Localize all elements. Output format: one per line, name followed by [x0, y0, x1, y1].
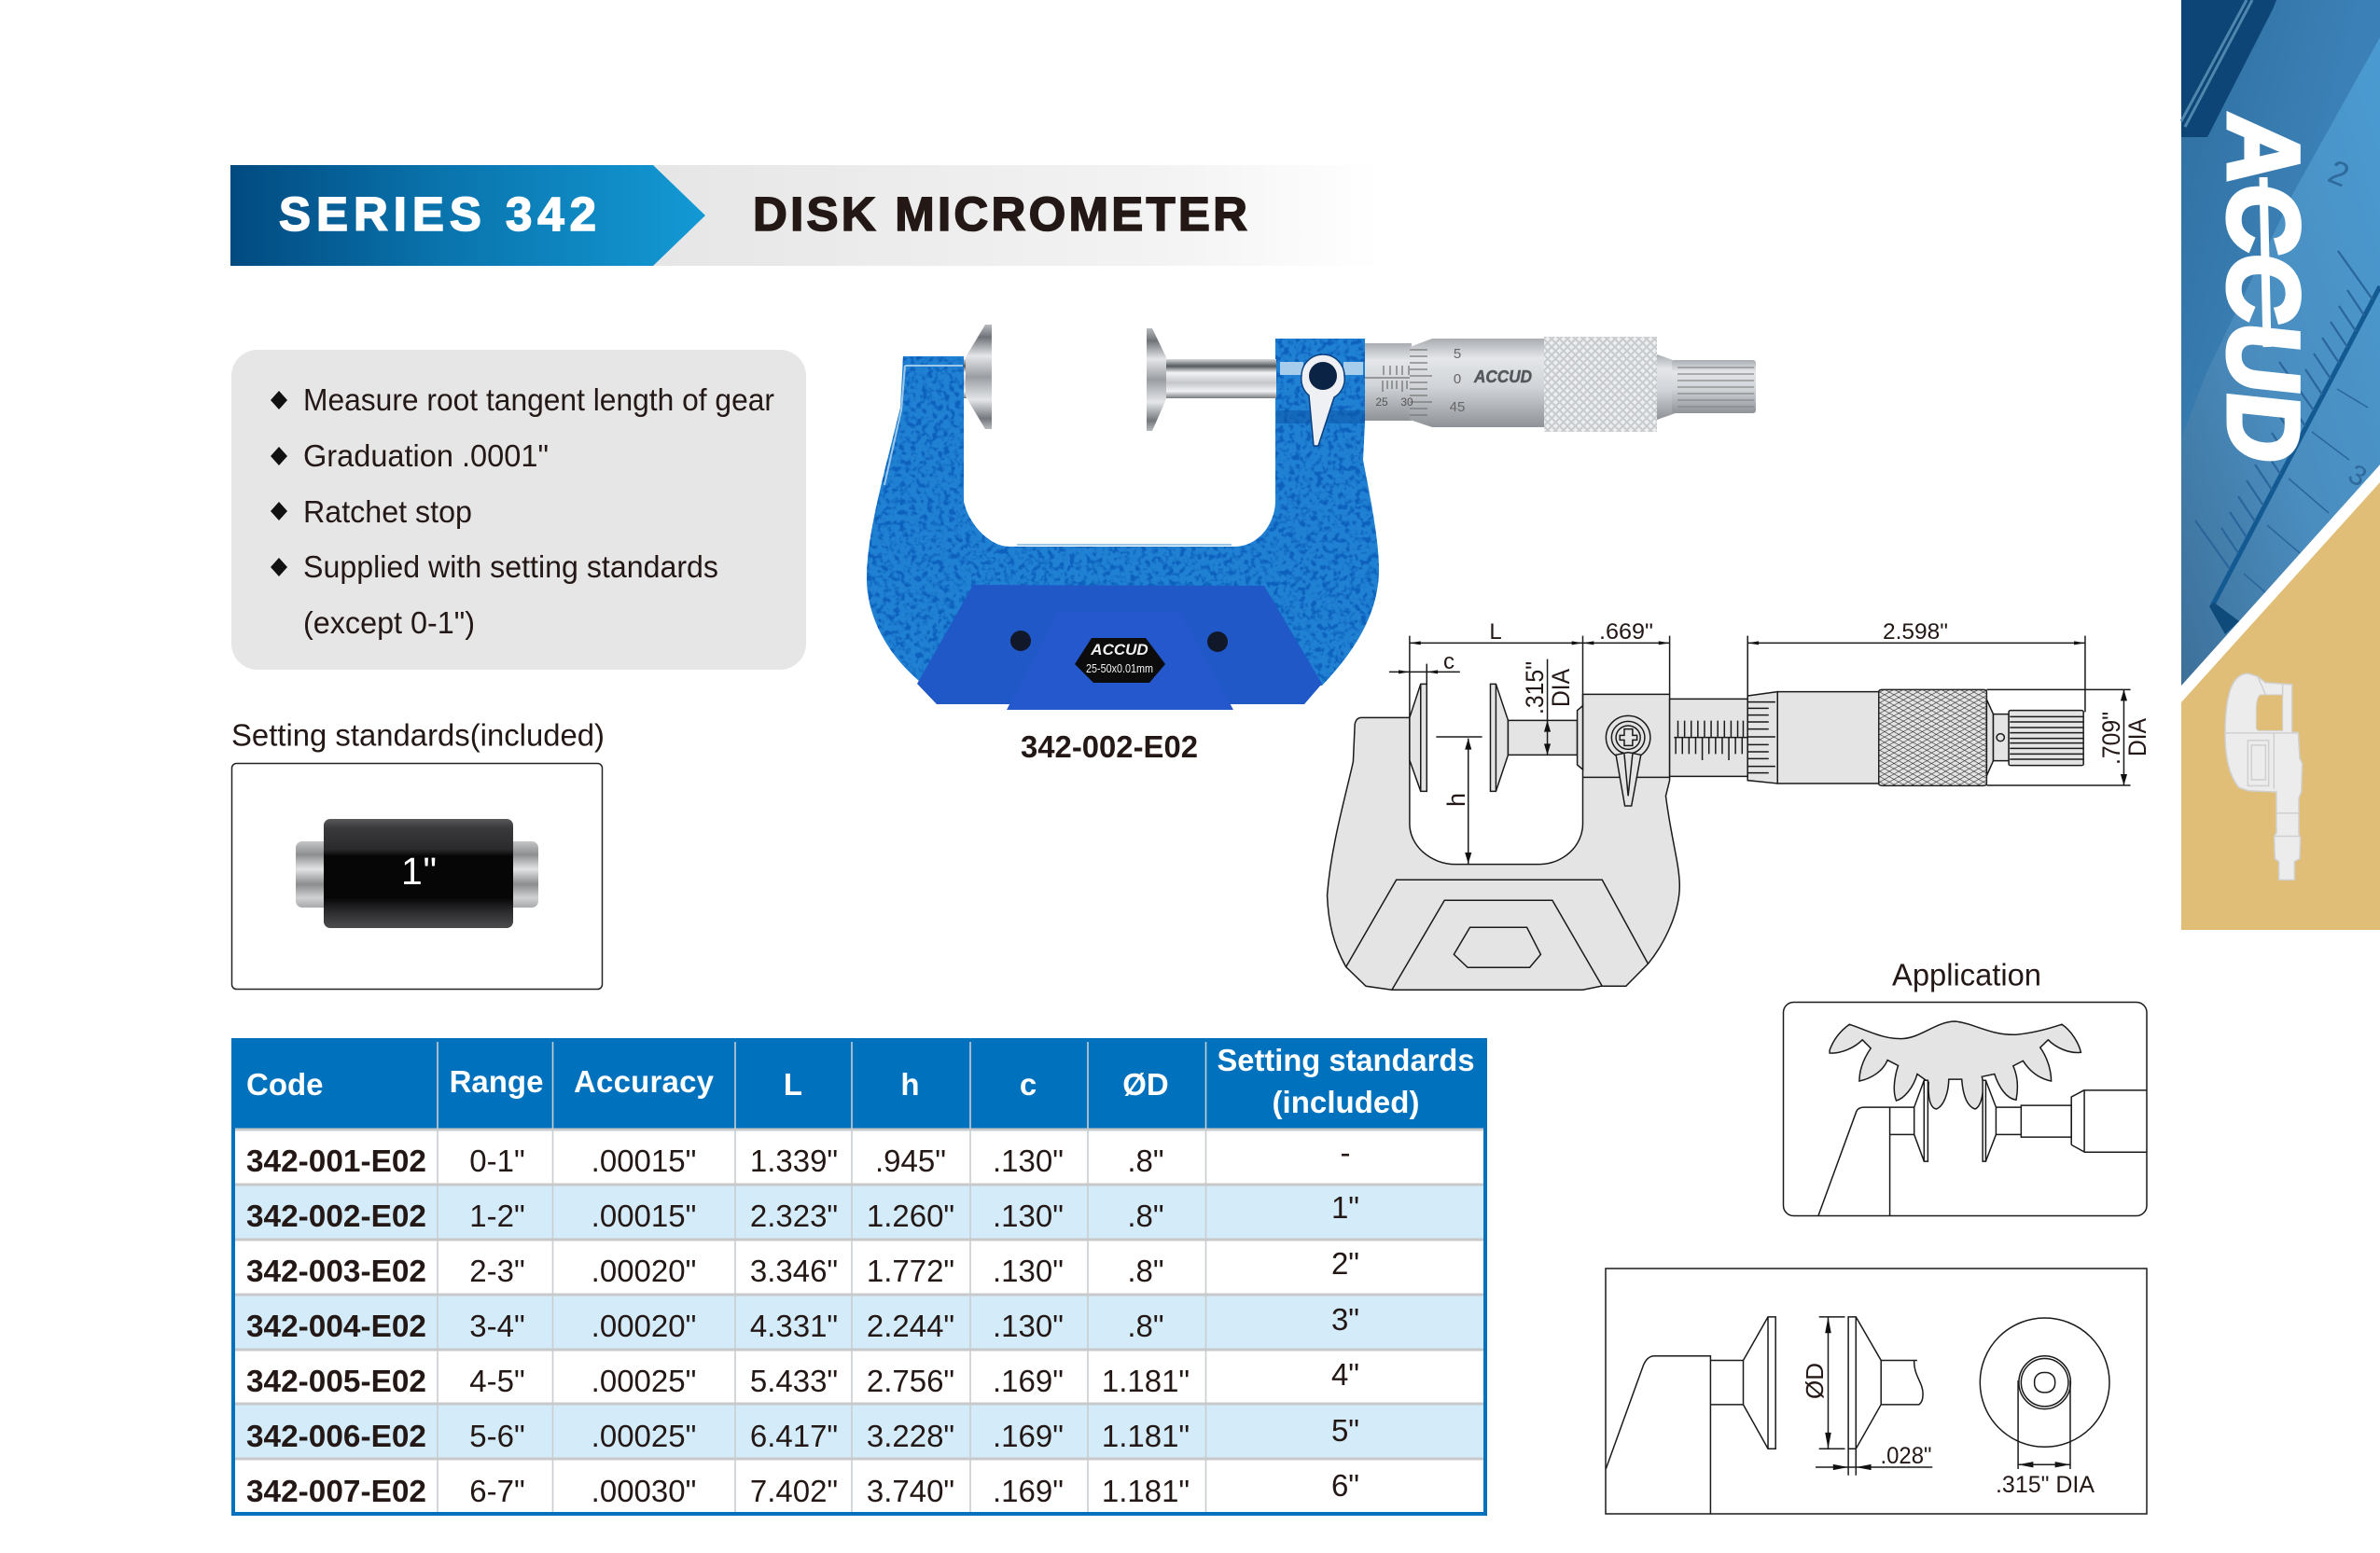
row 342-007-E02: 6" — [1331, 1468, 1359, 1503]
frame — [867, 339, 1379, 686]
detail labels: .315" DIA — [1996, 1472, 2095, 1498]
thimble numerals and logo: 25 — [1375, 395, 1388, 409]
thimble numerals and logo: 5 — [1454, 346, 1461, 362]
row 342-001-E02: 0-1" — [469, 1144, 525, 1178]
table header: Code — [246, 1067, 323, 1102]
row 342-006-E02: 342-006-E02 — [246, 1419, 426, 1453]
feature: setting standards — [271, 549, 718, 640]
row 342-004-E02: 342-004-E02 — [246, 1309, 426, 1343]
row 342-003-E02: 342-003-E02 — [246, 1254, 426, 1288]
row 342-002-E02: 2.323" — [750, 1199, 838, 1233]
row 342-007-E02: .00030" — [592, 1474, 696, 1508]
row 342-004-E02: 4.331" — [750, 1309, 838, 1343]
row 342-005-E02: 1.181" — [1102, 1364, 1190, 1398]
alternating row shading — [233, 1185, 1485, 1459]
ruler photo panel — [2181, 0, 2380, 686]
detail labels: ØD — [1801, 1363, 1829, 1399]
row 342-007-E02: 342-007-E02 — [246, 1474, 426, 1508]
thimble numerals and logo: 30 — [1400, 395, 1413, 409]
row 342-005-E02: 4" — [1331, 1357, 1359, 1392]
row 342-001-E02: .00015" — [592, 1144, 696, 1178]
row 342-006-E02: 1.181" — [1102, 1419, 1190, 1453]
dimension labels — [1442, 619, 2151, 807]
table header — [231, 1038, 1487, 1129]
thimble numerals and logo: 0 — [1454, 371, 1461, 387]
row 342-002-E02: .00015" — [592, 1199, 696, 1233]
logo badge: ACCUD — [1090, 641, 1148, 659]
panel: setting standard image — [231, 763, 603, 989]
row 342-004-E02: 2.244" — [867, 1309, 954, 1343]
logo badge — [1075, 638, 1165, 683]
thimble numerals and logo: 45 — [1450, 399, 1465, 415]
dimension labels: h — [1442, 793, 1470, 807]
gear and anvils — [1818, 1021, 2147, 1216]
row 342-006-E02: 5" — [1331, 1413, 1359, 1448]
row 342-004-E02: 3" — [1331, 1302, 1359, 1337]
base cover — [917, 585, 1322, 710]
row 342-001-E02: - — [1340, 1135, 1351, 1170]
panel: disk detail diagram — [1606, 1269, 2147, 1514]
gold panel — [2181, 482, 2380, 930]
grey title strip — [653, 165, 1381, 266]
product code caption: 342-002-E02 — [1021, 729, 1198, 764]
row 342-002-E02: .8" — [1127, 1199, 1164, 1233]
dimension labels: .669" — [1599, 619, 1653, 645]
lock clamp — [1606, 715, 1650, 806]
series label: SERIES 342 — [279, 187, 596, 241]
row 342-002-E02: 342-002-E02 — [246, 1199, 426, 1233]
table header: L — [784, 1067, 802, 1102]
row 342-002-E02 — [246, 1190, 1359, 1233]
knurled grip — [1544, 337, 1657, 432]
feature: ratchet stop: Ratchet stop — [303, 494, 472, 529]
detail labels: .028" — [1881, 1443, 1931, 1469]
feature: graduation: Graduation .0001" — [303, 438, 549, 473]
technical drawing — [1328, 619, 2151, 990]
row 342-006-E02: 6.417" — [750, 1419, 838, 1453]
ruler photo panel: 3 — [2343, 459, 2372, 493]
row 342-007-E02: 6-7" — [469, 1474, 525, 1508]
thimble — [1410, 339, 1544, 427]
row 342-007-E02: 3.740" — [867, 1474, 954, 1508]
side banner — [2181, 0, 2380, 930]
dimension labels: DIA — [1547, 669, 1575, 707]
setting standards heading: Setting standards(included) — [231, 718, 605, 752]
row 342-001-E02: 1.339" — [750, 1144, 838, 1178]
row 342-003-E02: .8" — [1127, 1254, 1164, 1288]
row 342-007-E02 — [246, 1468, 1359, 1508]
table header: Range — [450, 1064, 543, 1099]
feature: setting standards: (except 0-1") — [303, 605, 475, 640]
blue series arrow — [230, 165, 705, 266]
row 342-002-E02: .130" — [993, 1199, 1064, 1233]
row 342-005-E02: 2.756" — [867, 1364, 954, 1398]
photo: disk micrometer — [867, 325, 1756, 710]
table header: h — [900, 1067, 920, 1102]
thimble numerals and logo: ACCUD — [1473, 367, 1532, 386]
anvil disk — [964, 325, 992, 429]
row 342-001-E02: .130" — [993, 1144, 1064, 1178]
dimension labels: c — [1443, 649, 1454, 674]
row 342-006-E02: .00025" — [592, 1419, 696, 1453]
application heading: Application — [1892, 957, 2041, 992]
lock clamp — [1301, 354, 1344, 446]
row 342-004-E02: .130" — [993, 1309, 1064, 1343]
row 342-006-E02 — [246, 1413, 1359, 1453]
row 342-003-E02: 1.772" — [867, 1254, 954, 1288]
table background — [233, 1040, 1485, 1514]
row 342-004-E02 — [246, 1302, 1359, 1343]
feature: root tangent: Measure root tangent length of gear — [303, 382, 774, 417]
row 342-003-E02: 2" — [1331, 1246, 1359, 1281]
dimension labels: DIA — [2123, 718, 2151, 756]
row 342-004-E02: .00020" — [592, 1309, 696, 1343]
ratchet — [1657, 354, 1756, 420]
row 342-001-E02: .8" — [1127, 1144, 1164, 1178]
logo: ACCUD: ACCUD — [2207, 110, 2320, 468]
panel: application diagram — [1784, 1002, 2147, 1216]
table header: ØD — [1122, 1067, 1169, 1102]
icon: digital micrometer — [2225, 673, 2303, 880]
setting rod — [296, 819, 538, 928]
dimension lines — [1389, 636, 2131, 864]
row 342-005-E02: .169" — [993, 1364, 1064, 1398]
disk detail drawing — [1606, 1317, 2109, 1514]
feature: setting standards: Supplied with setting standards — [303, 549, 718, 584]
row 342-004-E02: 3-4" — [469, 1309, 525, 1343]
row 342-004-E02: .8" — [1127, 1309, 1164, 1343]
detail labels — [1801, 1363, 2095, 1498]
dimension labels: .315" — [1521, 661, 1549, 714]
row 342-002-E02: 1-2" — [469, 1199, 525, 1233]
row 342-002-E02: 1.260" — [867, 1199, 954, 1233]
row 342-003-E02: .00020" — [592, 1254, 696, 1288]
row 342-005-E02: 342-005-E02 — [246, 1364, 426, 1398]
table header: c — [1020, 1067, 1037, 1102]
specification table — [231, 1038, 1487, 1514]
row 342-005-E02: 4-5" — [469, 1364, 525, 1398]
product title: DISK MICROMETER — [753, 187, 1247, 241]
spindle disk — [1147, 328, 1276, 431]
title banner — [230, 165, 1381, 266]
row 342-007-E02: 1.181" — [1102, 1474, 1190, 1508]
dimension labels: L — [1489, 619, 1502, 645]
row 342-003-E02: 3.346" — [750, 1254, 838, 1288]
row 342-005-E02: 5.433" — [750, 1364, 838, 1398]
dimension labels: .709" — [2097, 712, 2125, 765]
panel: features — [231, 350, 806, 670]
thimble ticks — [1410, 350, 1432, 415]
ruler photo panel: 2 — [2323, 152, 2355, 194]
thimble numerals and logo — [1375, 346, 1532, 415]
row 342-005-E02 — [246, 1357, 1359, 1398]
row 342-007-E02: .169" — [993, 1474, 1064, 1508]
row 342-002-E02: 1" — [1331, 1190, 1359, 1225]
logo badge: 25-50x0.01mm — [1086, 661, 1153, 675]
drawing: micrometer outline — [1328, 636, 2131, 990]
dimension labels: 2.598" — [1883, 619, 1948, 645]
row 342-003-E02: 2-3" — [469, 1254, 525, 1288]
row 342-003-E02: .130" — [993, 1254, 1064, 1288]
sleeve — [1365, 343, 1412, 421]
row 342-005-E02: .00025" — [592, 1364, 696, 1398]
row 342-003-E02 — [246, 1246, 1359, 1288]
row 342-001-E02: .945" — [875, 1144, 946, 1178]
table header: Setting standards — [1217, 1043, 1474, 1077]
row 342-006-E02: 3.228" — [867, 1419, 954, 1453]
table header: (included) — [1273, 1085, 1420, 1119]
table header: Accuracy — [574, 1064, 715, 1099]
row 342-001-E02: 342-001-E02 — [246, 1144, 426, 1178]
row 342-007-E02: 7.402" — [750, 1474, 838, 1508]
row 342-006-E02: 5-6" — [469, 1419, 525, 1453]
row 342-001-E02 — [246, 1135, 1351, 1178]
row 342-006-E02: .169" — [993, 1419, 1064, 1453]
scale marks — [1365, 366, 1437, 392]
setting rod: 1 " — [401, 850, 437, 893]
